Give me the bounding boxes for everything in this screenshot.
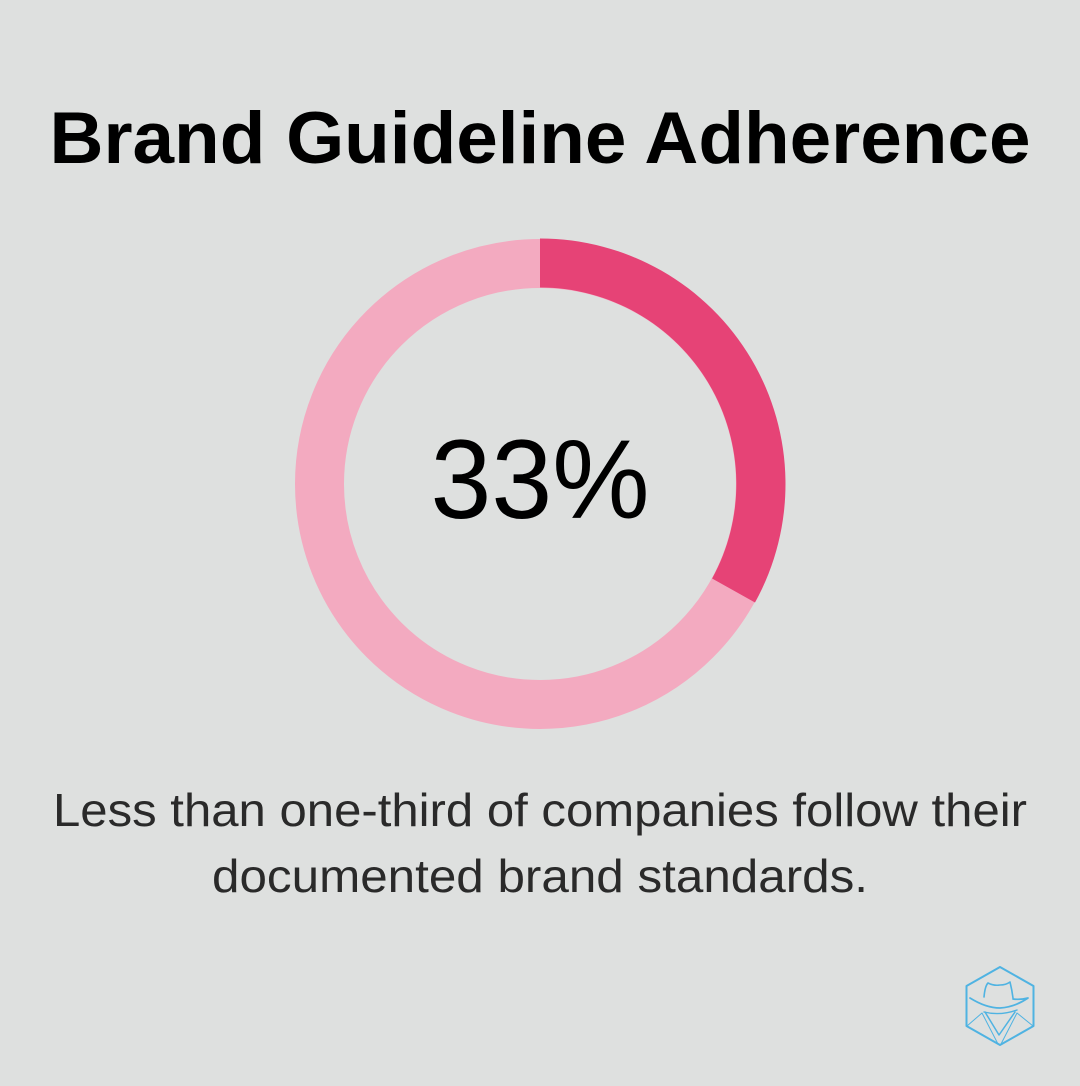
donut track: remaining 67% — [320, 264, 760, 704]
description text: documented brand standards. — [212, 850, 868, 902]
title: Brand Guideline Adherence — [50, 98, 1030, 179]
icon: hexagon logo with spy hat — [966, 967, 1034, 1045]
description text — [53, 784, 1027, 902]
donut chart — [320, 238, 785, 704]
donut segment: 33% — [540, 238, 785, 602]
description text: Less than one-third of companies follow their — [53, 784, 1027, 836]
center value: 33% — [430, 417, 650, 542]
